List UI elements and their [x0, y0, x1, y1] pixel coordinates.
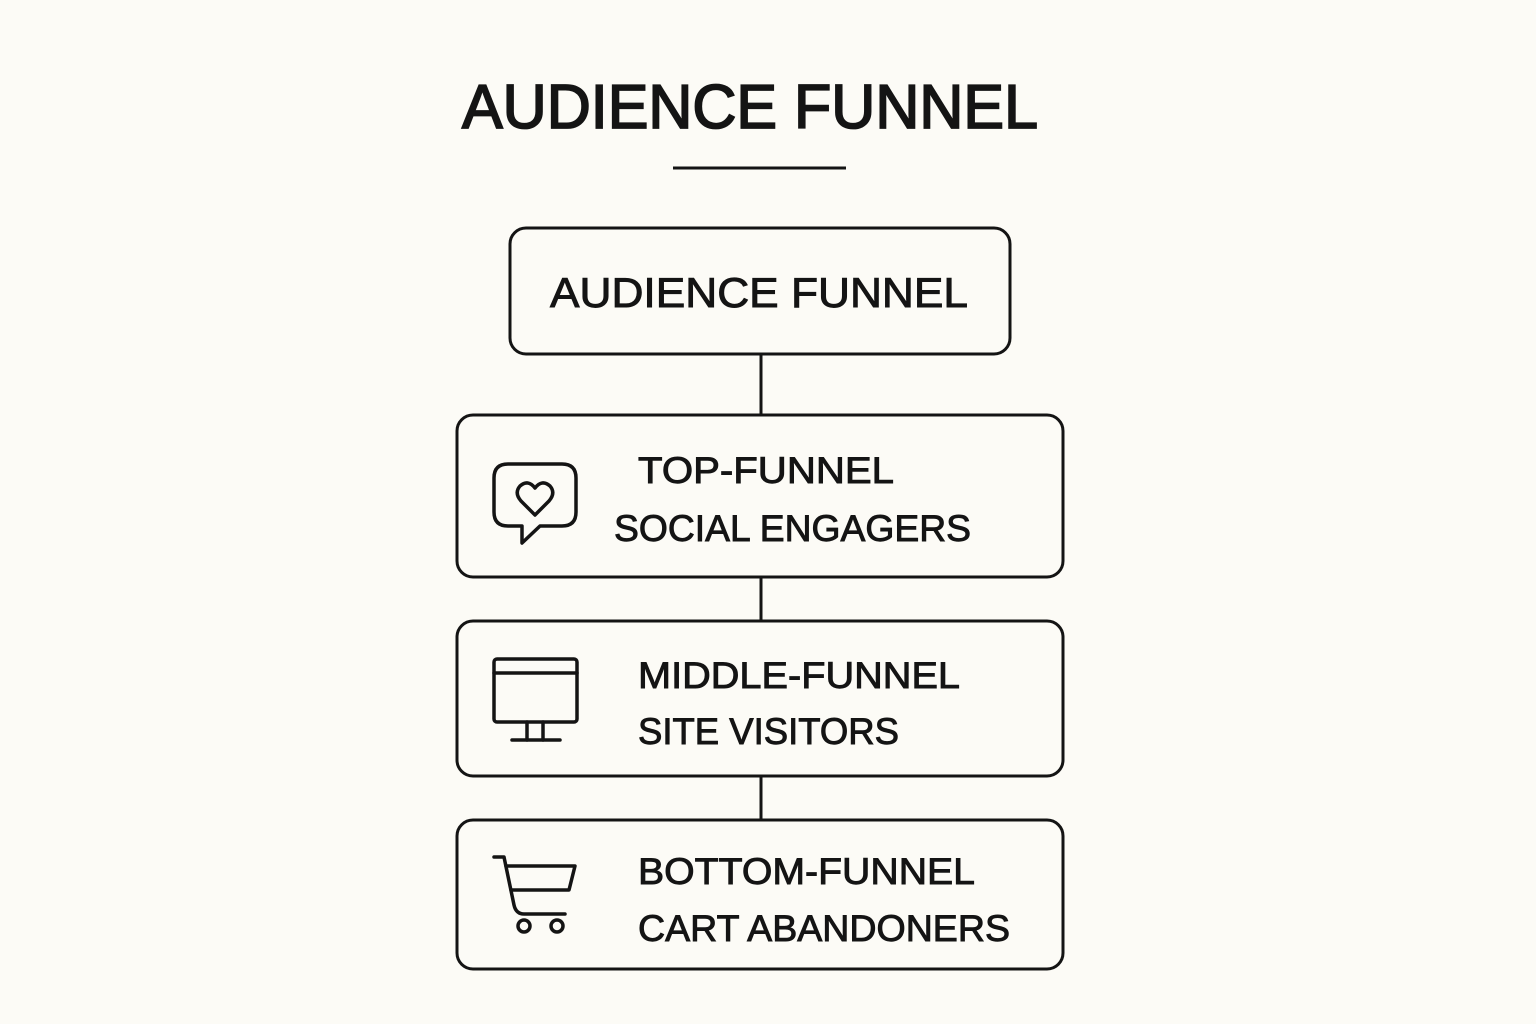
icon: cart [494, 857, 575, 932]
box: audience funnel header [510, 228, 1010, 354]
box: bottom-funnel [457, 820, 1063, 969]
title: AUDIENCE FUNNEL [462, 73, 1038, 142]
connectors [760, 354, 762, 820]
box: middle-funnel: MIDDLE-FUNNEL [638, 655, 960, 696]
icon: monitor [494, 659, 577, 740]
box: bottom-funnel: BOTTOM-FUNNEL [638, 851, 975, 892]
box: middle-funnel: SITE VISITORS [638, 711, 899, 752]
box: audience funnel header: AUDIENCE FUNNEL [550, 269, 968, 316]
box: top-funnel: SOCIAL ENGAGERS [614, 508, 971, 549]
box: top-funnel: TOP-FUNNEL [638, 450, 894, 491]
box: top-funnel [457, 415, 1063, 577]
box: middle-funnel [457, 621, 1063, 776]
box: bottom-funnel: CART ABANDONERS [638, 908, 1010, 949]
icon: chat heart [494, 464, 576, 543]
